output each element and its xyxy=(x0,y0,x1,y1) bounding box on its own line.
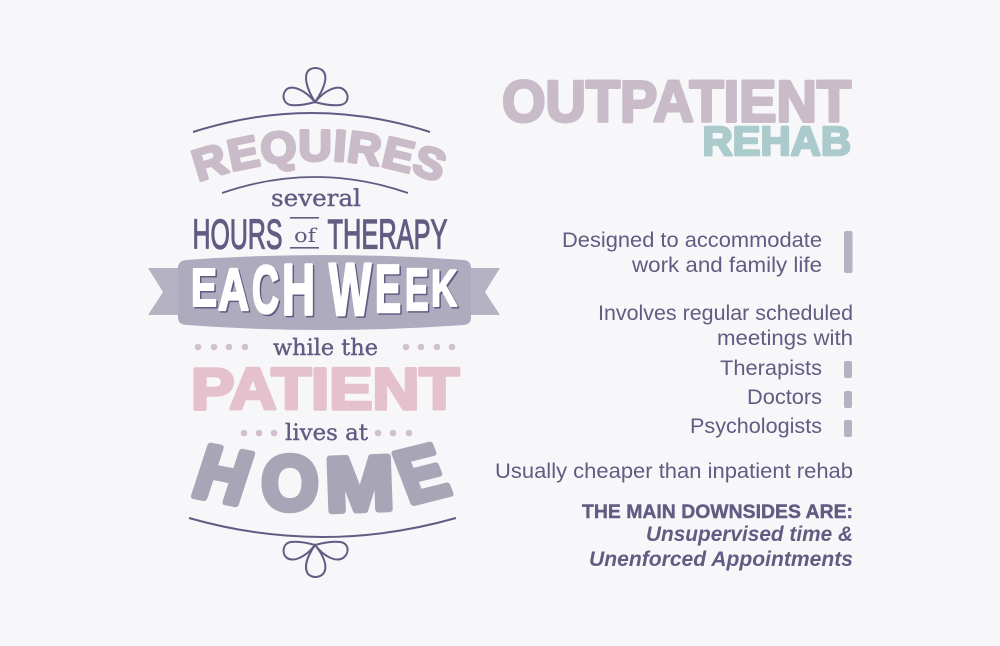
heading: each week: H xyxy=(284,250,317,332)
heading: each week: E xyxy=(375,251,401,327)
bottom arc xyxy=(189,518,456,537)
heading: home xyxy=(184,429,459,528)
heading: requires: U xyxy=(298,121,332,170)
text: while the: while the xyxy=(273,336,378,361)
text: several: several xyxy=(271,186,361,212)
title: outpatient: OUTPATIENT xyxy=(502,70,851,134)
text block: meetings xyxy=(598,302,853,350)
dots: lower row xyxy=(241,430,412,436)
list item: doctors: Doctors xyxy=(747,386,822,409)
heading: hours of therapy: of xyxy=(294,223,318,247)
heading: each week: W xyxy=(330,250,373,332)
heading: each week: A xyxy=(220,259,251,325)
heading: requires: I xyxy=(332,121,348,171)
heading: each week: E xyxy=(192,259,219,319)
text: lives at: lives at xyxy=(285,421,368,446)
heading: hours of therapy: THERAPY xyxy=(328,210,448,258)
heading: requires xyxy=(186,121,452,192)
heading: each week: E xyxy=(191,258,217,317)
heading: patient: PATIENT xyxy=(191,357,459,422)
heading: each week: K xyxy=(432,260,459,319)
text block: designed: Designed to accommodate xyxy=(562,229,822,252)
list item: psychologists: Psychologists xyxy=(690,415,822,438)
dots: upper row xyxy=(195,344,455,350)
heading: requires: R xyxy=(345,122,385,175)
heading: home: E xyxy=(384,429,459,520)
top arc xyxy=(193,113,430,132)
text block: downsides: THE MAIN DOWNSIDES ARE: xyxy=(582,502,853,523)
heading: each week: C xyxy=(252,252,279,328)
list item: therapists: Therapists xyxy=(720,357,822,380)
bar: designed xyxy=(844,231,852,273)
heading: requires: S xyxy=(407,135,452,192)
text block: designed xyxy=(562,229,822,277)
ribbon banner xyxy=(148,255,500,330)
title: rehab: REHAB xyxy=(702,118,851,164)
text block: designed: work and family life xyxy=(631,254,822,277)
heading: each week xyxy=(191,248,459,332)
heading: home: O xyxy=(262,441,318,526)
text block: downsides: Unsupervised time & xyxy=(646,523,853,546)
heading: hours of therapy xyxy=(192,210,448,258)
icon: top flourish xyxy=(284,68,348,105)
text block: downsides xyxy=(582,502,853,571)
heading: each week: E xyxy=(406,259,430,325)
icon: bottom flourish xyxy=(284,542,348,577)
list item: doctors xyxy=(747,386,852,409)
heading: home: M xyxy=(324,440,395,528)
heading: requires: R xyxy=(186,133,233,191)
heading: each week: K xyxy=(431,258,457,318)
heading: requires: E xyxy=(223,126,263,181)
heading: requires: Q xyxy=(258,121,299,174)
heading: home: H xyxy=(184,429,262,521)
heading: hours of therapy: HOURS xyxy=(192,210,282,258)
text block: meetings: Involves regular scheduled xyxy=(598,302,853,325)
second arc xyxy=(222,177,408,193)
text block: meetings: meetings with xyxy=(717,327,853,350)
heading: requires: E xyxy=(378,127,419,183)
text block: downsides: Unenforced Appointments xyxy=(589,548,853,571)
heading: each week: C xyxy=(254,254,281,329)
heading: each week: E xyxy=(405,258,429,323)
heading: each week: E xyxy=(376,252,403,328)
heading: each week: H xyxy=(282,249,315,330)
text: cheaper: Usually cheaper than inpatient rehab xyxy=(495,460,853,483)
heading: each week: W xyxy=(329,248,371,331)
heading: each week: A xyxy=(218,257,249,324)
